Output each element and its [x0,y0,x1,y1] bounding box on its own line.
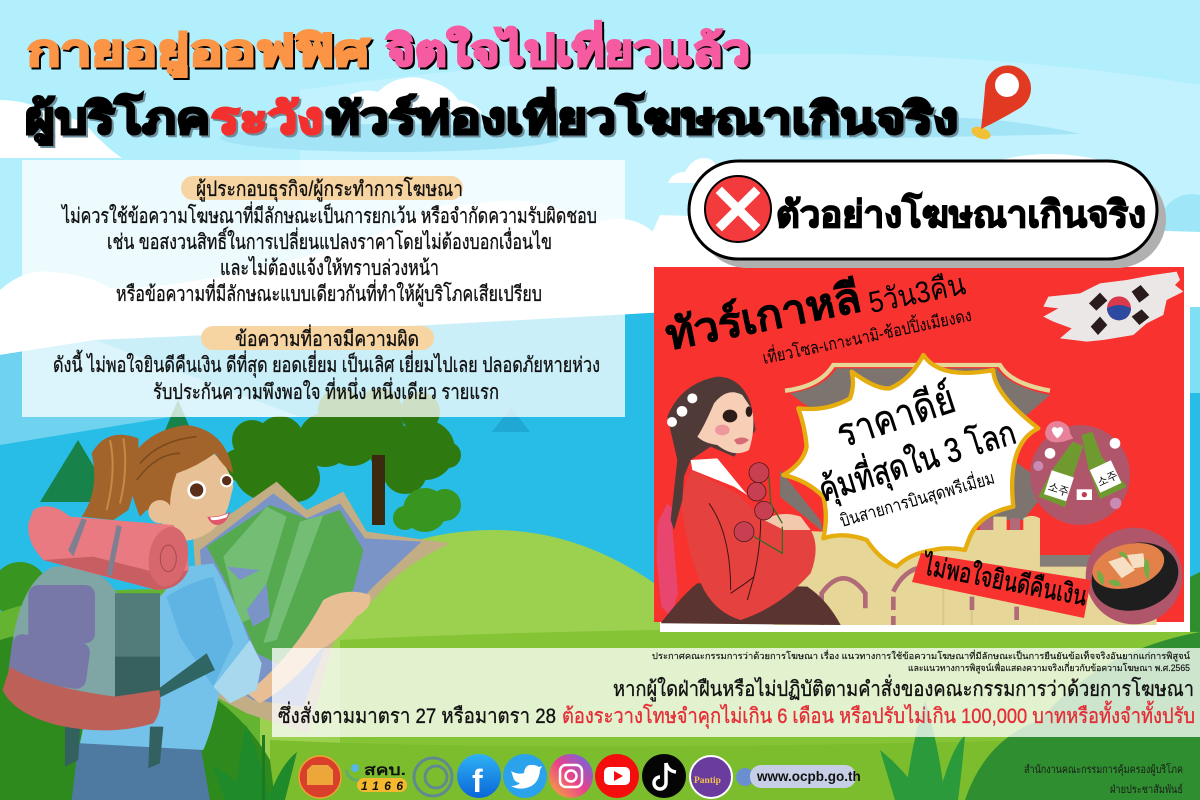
icon: youtube [595,754,639,798]
illustration: woman backpacker with map [3,425,450,800]
guidance text [60,201,597,307]
grass [212,725,297,800]
website link: www.ocpb.go.th [756,769,861,784]
legal citation [652,649,1190,674]
legal citation: ประกาศคณะกรรมการว่าด้วยการโฆษณา เรื่อง แนวทางการใช้ข้อความโฆษณาที่มีลักษณะเป็นการยืนยันข้อเท็จจริงอันยากแก่การพิสูจน์ [652,649,1190,662]
guidance text: และไม่ต้องแจ้งให้ทราบล่วงหน้า [220,256,439,280]
hills [0,589,360,800]
guidance text: ไม่ควรใช้ข้อความโฆษณาที่มีลักษณะเป็นการยกเว้น หรือจำกัดความรับผิดชอบ [60,201,597,228]
panel: legal penalty note [272,648,1200,737]
icon: soju bottles: 소주 [1046,479,1071,500]
penalty text: ซึ่งสั่งตามมาตรา 27 หรือมาตรา 28 [278,701,556,728]
credit: issuing office: ฝ่ายประชาสัมพันธ์ [1110,783,1183,796]
title line 1: กายอยู่ออฟฟิศ [27,27,371,77]
face [157,453,233,541]
hair [127,425,233,517]
jeans [72,743,210,800]
bedroll [28,506,188,590]
skirt [661,583,841,625]
shirt [80,563,262,750]
icon: twitter [503,754,547,798]
icon: soju bottles: 소주 [1095,467,1120,490]
penalty text [278,674,1195,729]
title line 2: ผู้บริโภค [25,92,210,145]
title line 1: จิตใจไปเที่ยวแล้ว [386,21,750,74]
example heading pill: ตัวอย่างโฆษณาเกินจริง [776,192,1146,235]
unlawful messages text: รับประกันความพึงพอใจ ที่หนึ่ง หนึ่งเดียว รายแรก [153,377,499,404]
poster heading [661,268,973,368]
icon: facebook: f [472,763,483,799]
credit: issuing office [1024,762,1183,796]
poster heading: เที่ยวโซล-เกาะนามิ-ช้อปปิ้งเมียงดง [760,303,973,368]
map [193,482,450,733]
logo: OCPB 1166 [346,762,407,793]
logo: OCPB 1166: 1166 [361,779,403,793]
pines [40,440,115,502]
icon: location pin [970,65,1031,142]
heading pill: operators: ผู้ประกอบธุรกิจ/ผู้กระทำการโฆษณา [196,177,463,202]
logo: OCPB 1166: สคบ. [364,762,406,779]
title line 2 [25,88,958,145]
heading pill: possibly unlawful messages: ข้อความที่อาจมีความผิด [235,324,419,351]
example heading pill [689,161,1166,268]
logo: circular emblem [414,758,452,796]
burst callout: ราคาดีย์ [831,376,961,457]
hand [764,514,811,530]
unlawful messages text: ดังนี้ ไม่พอใจยินดีคืนเงิน ดีที่สุด ยอดเยี่ยม เป็นเลิศ เยี่ยมไปเลย ปลอดภัยหายห่วง [53,350,600,378]
ribbon [657,503,678,617]
title line 2: ทัวร์ท่องเที่ยวโฆษณาเกินจริง [326,88,958,143]
unlawful messages text [53,350,600,404]
icon: instagram [549,754,593,798]
footer logos and social icons [299,754,861,799]
refund tag [912,549,1091,618]
heading pill: possibly unlawful messages [201,324,434,351]
woman in hanbok [657,377,841,625]
icon: tiktok [642,754,686,798]
trees [222,388,461,502]
panel: example advert poster [654,267,1190,632]
guidance text: หรือข้อความที่มีลักษณะแบบเดียวกันที่ทำให้ผู้บริโภคเสียเปรียบ [116,279,542,307]
ponytail [82,435,139,520]
straps [157,653,215,698]
lower roll [3,667,160,730]
burst callout: บินสายการบินสุดพรีเมี่ยม [837,466,997,532]
backpack [10,566,117,697]
logo: seal [299,756,341,798]
burst callout [783,355,1038,567]
face [697,392,753,453]
icon: Korean flag [1043,272,1183,342]
icon: kimchi stew [1084,528,1186,624]
burst callout: คุ้มที่สุดใน 3 โลก [813,409,1021,511]
roses [734,463,773,542]
icon: pantip [690,756,732,798]
legal citation: และแนวทางการพิสูจน์เพื่อแสดงความจริงเกี่ยวกับข้อความโฆษณา พ.ศ.2565 [908,661,1190,674]
hair flowers [667,393,697,427]
icon: pantip: Pantip [694,776,721,786]
title line 2: ระวัง [211,95,323,143]
guidance text: เช่น ขอสงวนสิทธิ์ในการเปลี่ยนแปลงราคาโดยไม่ต้องบอกเงื่อนไข [107,226,552,254]
refund tag: ไม่พอใจยินดีคืนเงิน [919,549,1090,612]
icon: soju bottles [1030,421,1130,525]
title line 1 [27,21,750,77]
website link [736,765,861,788]
palace illustration [773,365,1157,625]
jacket [681,470,816,620]
panel: advertiser guidance [22,160,625,417]
poster heading: 5วัน3คืน [866,268,968,320]
poster heading: ทัวร์เกาหลี [661,273,865,359]
hair [667,377,756,530]
arm [247,592,371,703]
icon: facebook [457,754,501,799]
icon: red cross [705,176,771,242]
